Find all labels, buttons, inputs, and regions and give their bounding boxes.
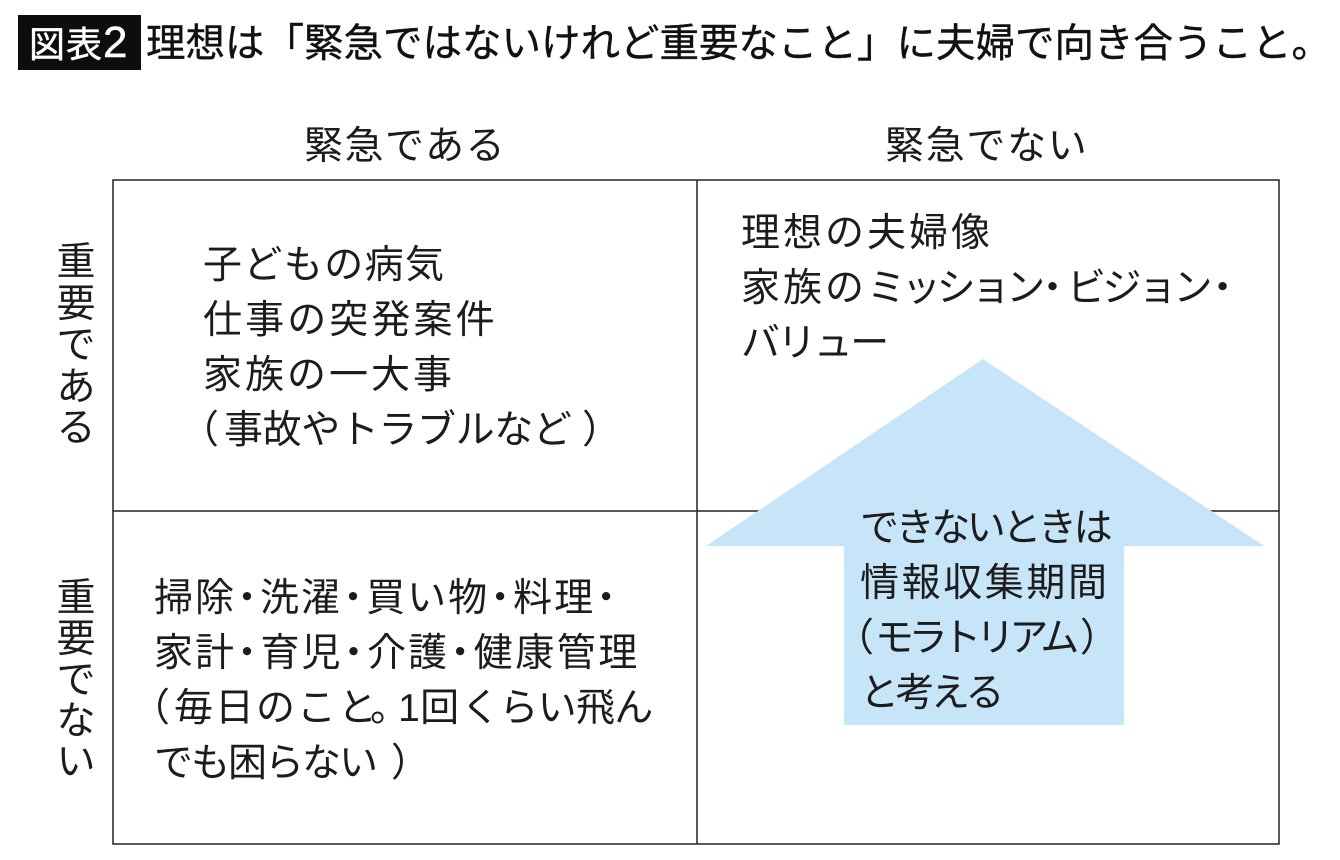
- arrow callout text: と考える: [860, 672, 1001, 715]
- row heading: important: あ: [56, 366, 96, 408]
- arrow callout text: （モラトリアム）: [835, 617, 1119, 660]
- panel: urgent and important: 仕事の突発案件: [203, 299, 498, 342]
- panel: urgent but not important: 家計・育児・介護・健康管理: [154, 632, 640, 675]
- panel: urgent and important: [180, 244, 621, 452]
- icon: upward arrow: [706, 359, 1264, 725]
- column heading: urgent: 緊急である: [304, 125, 506, 168]
- arrow callout text: できないときは: [860, 507, 1109, 550]
- row heading: not important: で: [56, 659, 96, 702]
- arrow callout text: 情報収集期間: [860, 562, 1110, 605]
- panel: urgent and important: 家族の一大事: [203, 354, 455, 397]
- panel: urgent but not important: （毎日のこと。1回くらい飛ん: [131, 687, 653, 730]
- arrow callout text: [835, 507, 1119, 715]
- panel: urgent but not important: 掃除・洗濯・買い物・料理・: [154, 577, 619, 620]
- row heading: important: 重: [56, 241, 96, 284]
- title text: 理想は「緊急ではないけれど重要なこと」に夫婦で向き合うこと。: [146, 22, 1331, 66]
- panel: urgent and important: （事故やトラブルなど ）: [180, 409, 621, 452]
- panel: urgent and important: 子どもの病気: [203, 244, 445, 287]
- row heading: not important: 要: [56, 618, 96, 661]
- panel: not urgent but important: 理想の夫婦像: [741, 212, 993, 255]
- title: [18, 15, 1331, 70]
- row heading: not important: [56, 577, 96, 784]
- panel: not urgent but important: [741, 212, 1242, 365]
- row heading: important: 要: [56, 282, 96, 326]
- row heading: not important: 重: [56, 577, 96, 620]
- row heading: important: [56, 241, 96, 450]
- row heading: important: る: [56, 407, 96, 450]
- column heading: not urgent: 緊急でない: [885, 125, 1089, 168]
- row heading: important: で: [56, 324, 96, 367]
- panel: urgent but not important: でも困らない ）: [154, 742, 430, 785]
- panel: urgent but not important: [131, 577, 653, 785]
- panel: not urgent but important: バリュー: [741, 322, 887, 365]
- panel: not urgent but important: 家族のミッション・ビジョン・: [741, 267, 1242, 310]
- row heading: not important: い: [56, 741, 96, 784]
- figure label badge: 図表2: [29, 18, 128, 67]
- row heading: not important: な: [56, 700, 96, 743]
